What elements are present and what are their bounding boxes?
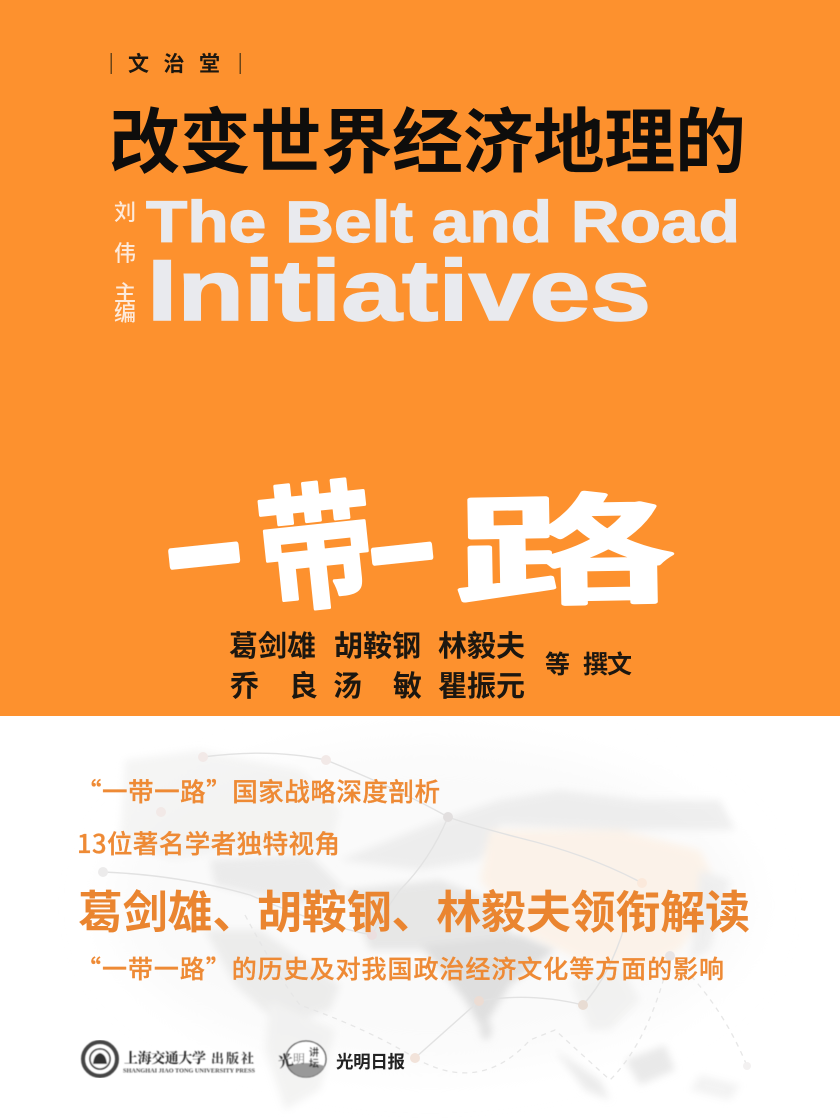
calligraphy: 一带一路: 路 (452, 454, 677, 631)
editor credit, vertical: 主 (114, 276, 136, 308)
logo: Shanghai Jiao Tong University Press: SHANGHAI JIAO TONG UNIVERSITY PRESS (123, 1068, 256, 1074)
authors list: 撰文 (583, 645, 632, 681)
logo text: 光明日报: 光明日报 (336, 1049, 406, 1074)
calligraphy: 一带一路: 一 (364, 479, 439, 620)
panel: white lower background (0, 716, 840, 1120)
logo: Shanghai Jiao Tong University Press (83, 1042, 256, 1076)
title: Chinese headline: 改变世界经济地理的 (109, 86, 746, 188)
editor credit, vertical (114, 195, 136, 328)
authors list: 良 (289, 663, 318, 705)
tagline: history and influence: “一带一路”的历史及对我国政治经济文化等方面的影响 (76, 950, 724, 986)
calligraphy: 一带一路: 一 (159, 464, 248, 637)
authors list: 胡鞍钢 (334, 623, 421, 665)
title: The Belt and Road: The Belt and Road (146, 190, 740, 255)
logo: Shanghai Jiao Tong University Press: 出版社 (211, 1048, 254, 1067)
authors list: 敏 (393, 663, 422, 705)
logo: Guangming lecture hall: 讲 (309, 1044, 319, 1059)
authors list: 瞿振元 (438, 663, 525, 705)
editor credit, vertical: 伟 (114, 236, 136, 268)
logo: Shanghai Jiao Tong University Press: 上海交通大学 (124, 1048, 206, 1068)
logo: Guangming lecture hall: 坛 (309, 1055, 319, 1070)
tagline: 13 scholars: 13位著名学者独特视角 (77, 824, 340, 861)
imprint mark: 文治堂: 文治堂 (128, 48, 220, 78)
logo: Guangming lecture hall: 明 (293, 1050, 305, 1067)
tagline: strategy analysis: “一带一路”国家战略深度剖析 (76, 772, 440, 809)
title: Initiatives: Initiatives (147, 243, 651, 339)
calligraphy: 一带一路 (159, 436, 677, 641)
panel: orange cover background (0, 0, 840, 716)
map: faded Eurasia background (98, 745, 751, 1110)
calligraphy: 一带一路: 带 (248, 436, 383, 641)
editor credit, vertical: 编 (114, 296, 136, 328)
authors list: 乔 (230, 663, 259, 705)
authors list: 等 (545, 645, 570, 681)
tagline: lead interpreters: 葛剑雄、胡鞍钢、林毅夫领衔解读 (78, 876, 750, 941)
authors list: 葛剑雄 (229, 623, 316, 665)
authors list: 林毅夫 (438, 623, 525, 665)
logo: Guangming lecture hall: 光 (276, 1049, 295, 1072)
authors list (229, 623, 632, 705)
logo: Guangming lecture hall (276, 1041, 326, 1077)
editor credit, vertical: 刘 (114, 195, 136, 227)
authors list: 汤 (333, 663, 362, 705)
